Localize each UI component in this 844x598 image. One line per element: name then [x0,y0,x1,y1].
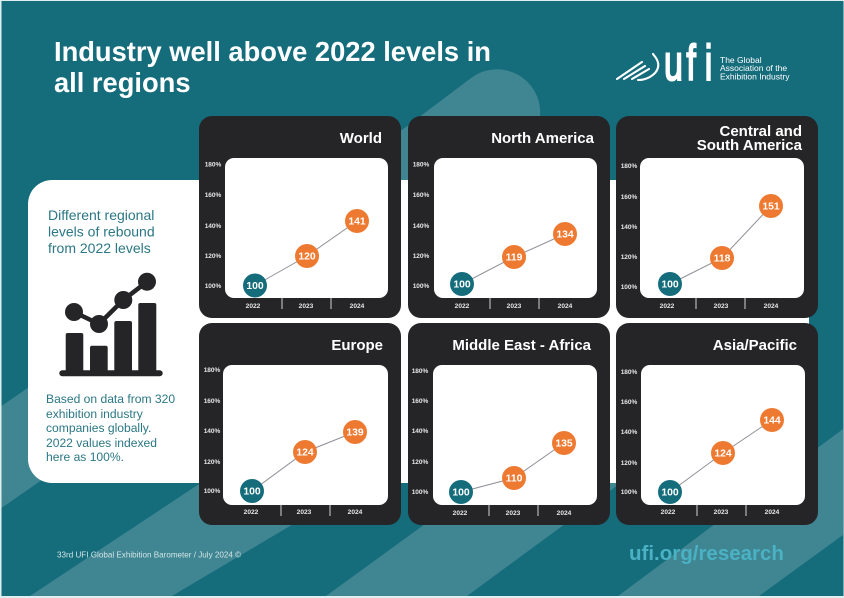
y axis: 140% [621,429,638,436]
line chart: 119 [506,253,523,264]
footer link: ufi.org/research [629,542,784,565]
line chart: 124 [714,449,732,460]
logo tagline: The Global [720,55,762,65]
line chart: 100 [661,280,679,291]
footer source: 33rd UFI Global Exhibition Barometer / July 2024 © [57,550,241,560]
x axis: 2022 [455,303,470,310]
y axis: 120% [621,254,638,261]
y axis: 180% [621,369,638,376]
y axis: 180% [621,163,638,170]
title: Industry well above 2022 levels in [54,36,491,67]
y axis: 160% [621,194,638,201]
UFI logo [617,36,790,92]
line chart: 151 [762,202,780,213]
x axis [246,298,365,310]
y axis: 100% [204,488,221,495]
x axis: 2024 [350,303,365,310]
x axis: 2023 [714,303,729,310]
y axis: 160% [412,398,429,405]
x axis: 2023 [714,509,729,516]
logo wordmark: f [686,36,696,92]
y axis: 100% [412,489,429,496]
intro heading: from 2022 levels [48,240,151,256]
y axis: 120% [204,459,221,466]
y axis: 100% [621,284,638,291]
logo wordmark: i [705,36,712,92]
line chart [243,209,369,298]
x axis: 2022 [244,509,259,516]
x axis: 2022 [661,509,676,516]
y axis: 160% [204,398,221,405]
x axis [453,505,572,517]
y axis: 120% [621,460,638,467]
intro note: Based on data from 320 [46,392,175,406]
y axis: 100% [205,283,222,290]
line chart [658,194,783,296]
y axis: 160% [621,399,638,406]
x axis [244,505,363,516]
line chart: 110 [506,474,523,485]
y axis: 140% [205,223,222,230]
y axis: 180% [412,368,429,375]
x axis: 2024 [765,509,780,516]
heading: Europe: Europe [331,337,383,354]
x axis [455,298,573,310]
x axis: 2023 [507,303,522,310]
y axis: 120% [412,459,429,466]
line chart: 100 [452,488,470,499]
y axis: 140% [413,223,430,230]
y axis: 140% [621,224,638,231]
intro heading: Different regional [48,207,154,223]
x axis: 2023 [506,510,521,517]
y axis: 180% [204,367,221,374]
x axis: 2024 [348,509,363,516]
panel: Middle East - Africa [408,323,610,525]
panel: Central and South America [616,116,818,318]
line chart: 100 [453,280,471,291]
y axis: 180% [413,161,430,168]
x axis [660,298,779,310]
title: all regions [54,67,191,98]
x axis [661,505,780,516]
x axis: 2022 [453,510,468,517]
heading: World: World [340,130,382,147]
line chart: 100 [246,281,264,292]
intro note: here as 100%. [46,450,124,464]
line chart: 144 [763,416,781,427]
x axis: 2024 [764,303,779,310]
logo wordmark: u [664,36,683,92]
x axis: 2024 [558,303,573,310]
line chart: 135 [555,439,573,450]
panel: intro [28,180,809,483]
y axis: 140% [204,428,221,435]
line chart: 124 [296,448,314,459]
x axis: 2022 [246,303,261,310]
heading: Middle East - Africa: Middle East - Africa [452,337,592,354]
y axis: 160% [413,192,430,199]
icon: wing mark [617,54,658,80]
heading: North America: North America [491,130,595,147]
y axis: 100% [413,283,430,290]
intro note: exhibition industry [46,407,144,421]
panel: World [199,116,401,318]
x axis: 2023 [299,303,314,310]
line chart: 134 [556,230,574,241]
line chart: 120 [298,252,316,263]
line chart: 100 [243,487,261,498]
x axis: 2023 [297,509,312,516]
panel: Europe [199,323,401,525]
y axis: 120% [413,253,430,260]
intro note: companies globally. [46,421,151,435]
panel: North America [408,116,610,318]
heading: Asia/Pacific: Asia/Pacific [713,337,797,354]
logo tagline: Association of the [720,63,787,73]
x axis: 2022 [660,303,675,310]
y axis: 120% [205,253,222,260]
panel: Asia/Pacific [616,323,818,525]
heading: Central and South America: Central and [719,123,802,140]
line chart: 100 [661,488,679,499]
line chart [658,408,784,504]
line chart: 118 [714,254,731,265]
x axis: 2024 [557,510,572,517]
y axis: 100% [621,489,638,496]
line chart [449,431,576,504]
logo tagline: Exhibition Industry [720,72,790,82]
line chart: 139 [346,428,364,439]
heading: Central and South America: South America [697,137,803,154]
line chart [450,222,577,296]
y axis: 160% [205,192,222,199]
y axis: 140% [412,428,429,435]
y axis: 180% [205,161,222,168]
icon: bar chart with trend line [59,273,163,376]
intro heading: levels of rebound [48,224,155,240]
line chart: 141 [348,217,366,228]
line chart [240,420,367,503]
intro note: 2022 values indexed [46,436,157,450]
